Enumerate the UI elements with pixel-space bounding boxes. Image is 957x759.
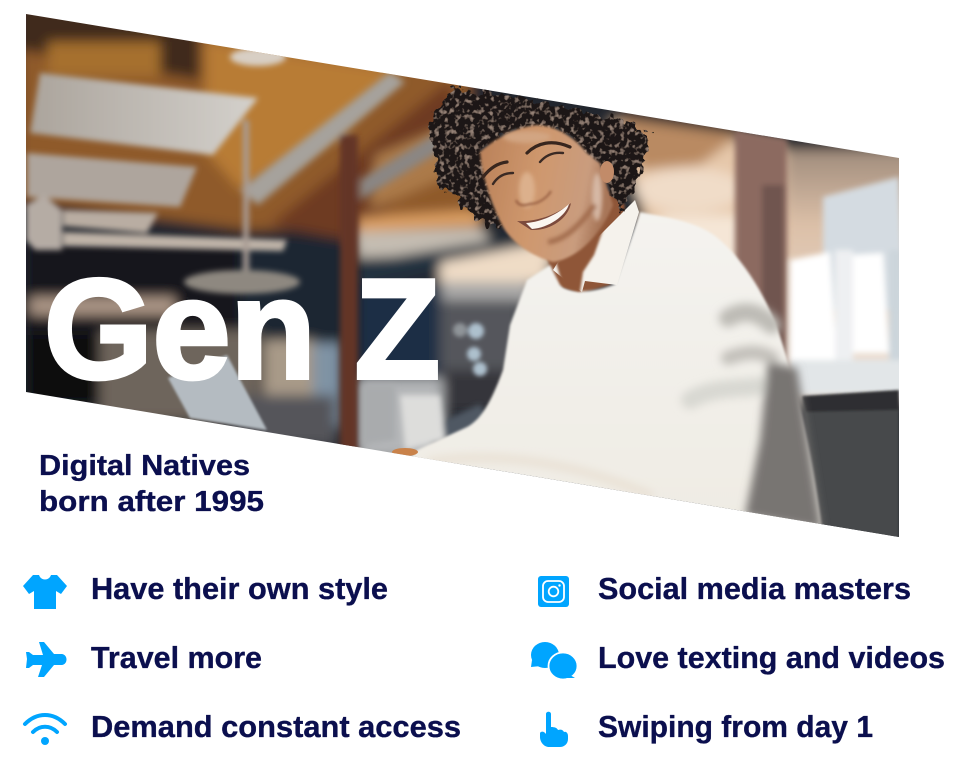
list row: texting: Love texting and videos <box>598 641 945 675</box>
icon: wifi <box>25 715 65 745</box>
list row: social media: Social media masters <box>598 572 911 606</box>
photo: laptop <box>168 355 267 430</box>
photo: man <box>392 90 822 540</box>
subtitle: digital natives <box>39 450 264 518</box>
man: face <box>480 125 613 262</box>
man: sweater folds and shadow <box>430 312 822 530</box>
photo: ceiling panels, beams and column <box>26 48 905 455</box>
man: neck inner <box>555 230 605 294</box>
list row: constant access: Demand constant access <box>91 710 461 744</box>
photo: blurred office background <box>26 14 899 537</box>
panel: hero photo of smiling man in office <box>26 14 899 537</box>
man: facial highlights and shadow <box>503 131 602 242</box>
man: nose <box>516 191 551 205</box>
list row: own style: Have their own style <box>91 572 388 606</box>
title: Gen Z: Gen Z <box>44 250 440 409</box>
photo: office chair <box>801 388 899 537</box>
icon: t-shirt <box>23 575 67 609</box>
man: collar <box>553 200 639 292</box>
icon: airplane <box>26 642 66 677</box>
photo: background bokeh lights <box>453 323 487 376</box>
man: eyebrows <box>483 143 570 177</box>
list row: travel <box>26 641 262 677</box>
icon: chat bubbles <box>531 642 578 680</box>
subtitle: digital natives: Digital Natives <box>39 450 250 482</box>
icon: pointing hand <box>540 712 568 747</box>
list row: swiping: Swiping from day 1 <box>598 710 873 744</box>
man: ear <box>600 161 614 183</box>
icon: instagram <box>538 576 569 607</box>
subtitle: digital natives: born after 1995 <box>39 486 264 518</box>
list row: travel: Travel more <box>91 641 262 675</box>
man: hand <box>392 448 418 456</box>
man: sweater <box>400 212 822 540</box>
man: eyes <box>493 153 563 184</box>
man: neck <box>545 190 625 294</box>
man: smile <box>517 203 571 230</box>
man: hair <box>430 90 650 232</box>
